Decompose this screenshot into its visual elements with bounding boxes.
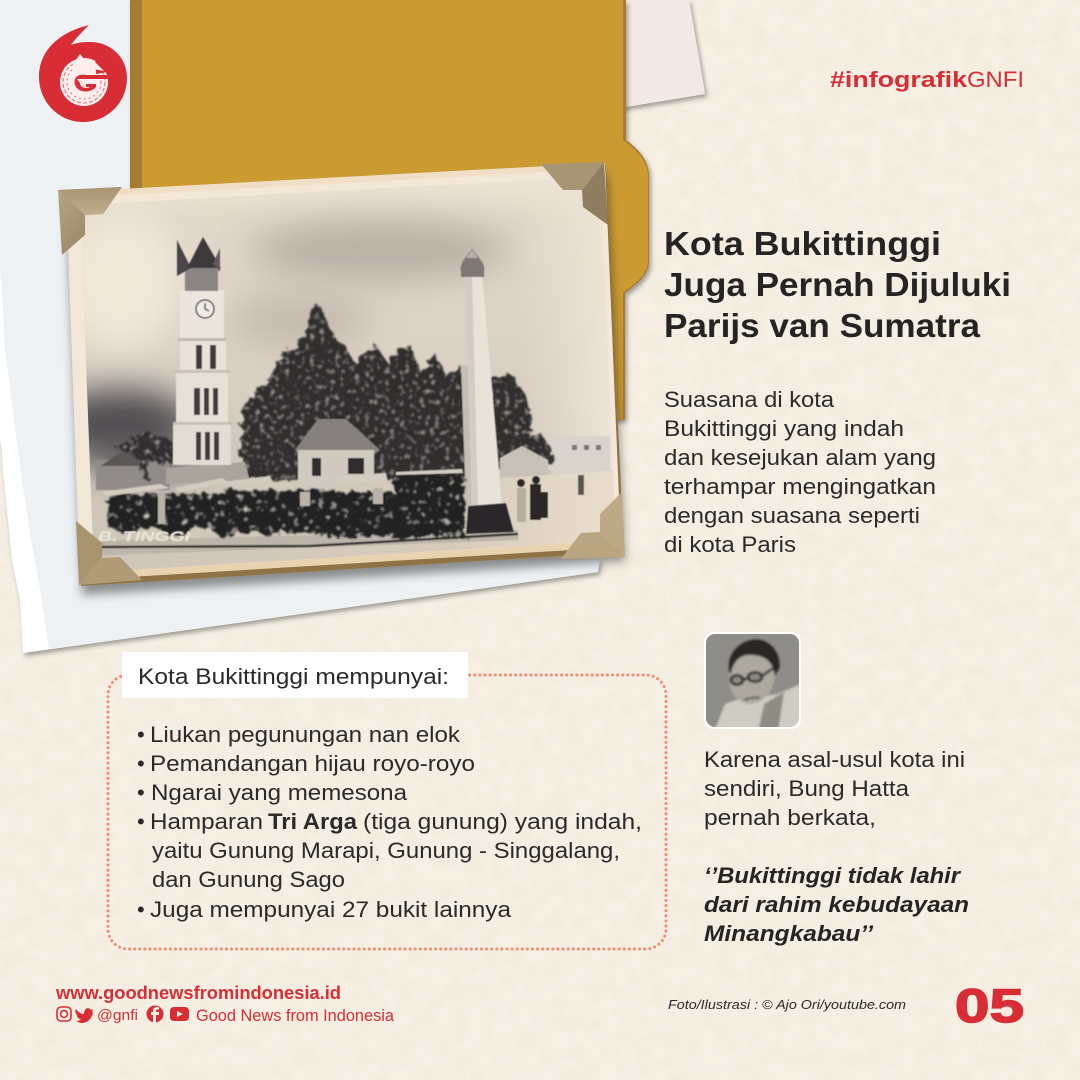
photo card — [45, 162, 640, 586]
back sheet of paper — [620, 0, 705, 108]
bulleted list: yaitu Gunung Marapi, Gunung - Singgalang, — [152, 838, 620, 863]
Hatta intro text — [704, 747, 965, 830]
folder — [130, 0, 649, 420]
bulleted list: • — [137, 897, 145, 922]
description paragraph — [664, 387, 936, 557]
portrait: Bung Hatta — [704, 632, 801, 729]
small house — [295, 419, 380, 484]
title — [664, 225, 1011, 344]
palm — [116, 432, 177, 480]
panel heading: Kota Bukittinggi mempunyai: — [138, 664, 449, 689]
icon: twitter — [75, 1008, 93, 1023]
bulleted list: Tri Arga — [268, 809, 358, 834]
bulleted list: Juga mempunyai 27 bukit lainnya — [150, 897, 512, 922]
title: Juga Pernah Dijuluki — [664, 266, 1011, 303]
panel: features list — [108, 652, 666, 949]
horse carts and crowd — [108, 474, 465, 540]
obelisk — [461, 249, 514, 534]
sepia photograph of Jam Gadang — [84, 186, 614, 570]
description paragraph: Suasana di kota — [664, 387, 835, 412]
footer: website and socials — [55, 983, 395, 1025]
photo corner: bottom right — [561, 492, 625, 559]
right house — [500, 446, 548, 482]
description paragraph: dan kesejukan alam yang — [664, 445, 936, 470]
social handle: @gnfi — [97, 1007, 138, 1024]
hashtag — [830, 67, 1024, 92]
description paragraph: dengan suasana seperti — [664, 503, 920, 528]
quote: dari rahim kebudayaan — [704, 892, 969, 917]
icon: instagram — [57, 1007, 71, 1021]
pedestrians — [517, 475, 584, 522]
logo ring with eagle head — [60, 54, 112, 106]
bulleted list — [137, 722, 642, 922]
title: Kota Bukittinggi — [664, 225, 941, 262]
photo corner: bottom left — [76, 521, 142, 585]
photo corner: top left — [58, 187, 122, 255]
quote — [704, 863, 969, 946]
description paragraph: di kota Paris — [664, 532, 796, 557]
bulleted list: Hamparan — [150, 809, 263, 834]
plaza ground — [92, 470, 614, 570]
Hatta intro text: pernah berkata, — [704, 805, 876, 830]
handwritten caption: B. TINGGI — [98, 528, 192, 544]
bulleted list: Liukan pegunungan nan elok — [150, 722, 461, 747]
footer: website and socials: www.goodnewsfromindonesia.id — [55, 983, 341, 1003]
brand name: Good News from Indonesia — [196, 1006, 395, 1025]
bulleted list: • — [137, 780, 145, 805]
icon: youtube — [170, 1007, 189, 1021]
Hatta intro text: Karena asal-usul kota ini — [704, 747, 965, 772]
title: Parijs van Sumatra — [664, 307, 981, 344]
bulleted list: Pemandangan hijau royo-royo — [150, 751, 475, 776]
quote: Minangkabau’’ — [704, 921, 874, 946]
hashtag: GNFI — [967, 67, 1024, 92]
bulleted list: • — [137, 751, 145, 776]
logo — [39, 25, 127, 122]
torn blue paper — [0, 0, 600, 653]
icon: facebook — [146, 1006, 164, 1023]
photo corner: top right — [541, 162, 608, 225]
clock tower: Jam Gadang — [166, 237, 250, 484]
bulleted list: dan Gunung Sago — [152, 867, 345, 892]
far buildings — [552, 436, 610, 474]
description paragraph: Bukittinggi yang indah — [664, 416, 904, 441]
quote: ‘’Bukittinggi tidak lahir — [704, 863, 962, 888]
photo credit: Foto/Ilustrasi : © Ajo Ori/youtube.com — [668, 997, 906, 1012]
hashtag: #infografik — [830, 67, 968, 92]
bulleted list: • — [137, 722, 145, 747]
panel heading — [122, 652, 468, 698]
description paragraph: terhampar mengingatkan — [664, 474, 936, 499]
bulleted list: Ngarai yang memesona — [151, 780, 408, 805]
page number: 05 — [955, 979, 1024, 1032]
bulleted list: (tiga gunung) yang indah, — [363, 809, 642, 834]
trees — [240, 304, 552, 480]
Hatta intro text: sendiri, Bung Hatta — [704, 776, 910, 801]
bulleted list: • — [137, 809, 145, 834]
